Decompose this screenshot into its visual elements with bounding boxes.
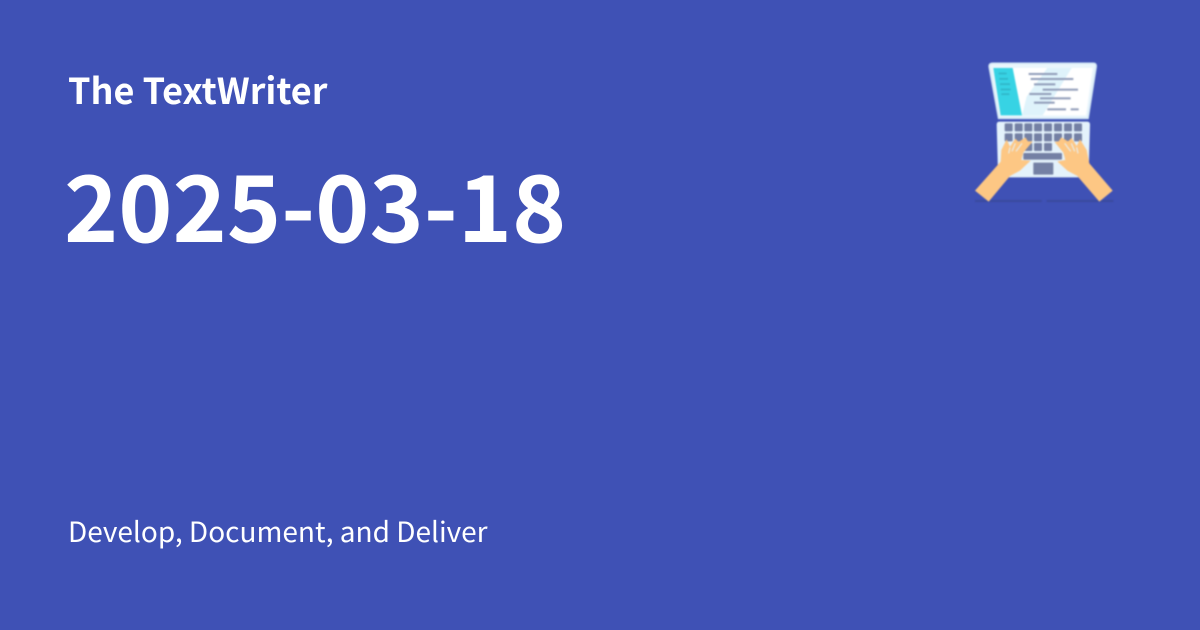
icon: laptop with typing hands	[974, 62, 1114, 202]
tagline: Develop, Document, and Deliver	[68, 511, 488, 551]
laptop keyboard base	[997, 122, 1090, 177]
laptop screen	[989, 63, 1096, 118]
shadow	[975, 200, 1113, 202]
post date: 2025-03-18	[64, 136, 566, 269]
right hand	[1055, 137, 1113, 202]
left hand	[975, 137, 1033, 202]
site title: The TextWriter	[68, 63, 327, 115]
